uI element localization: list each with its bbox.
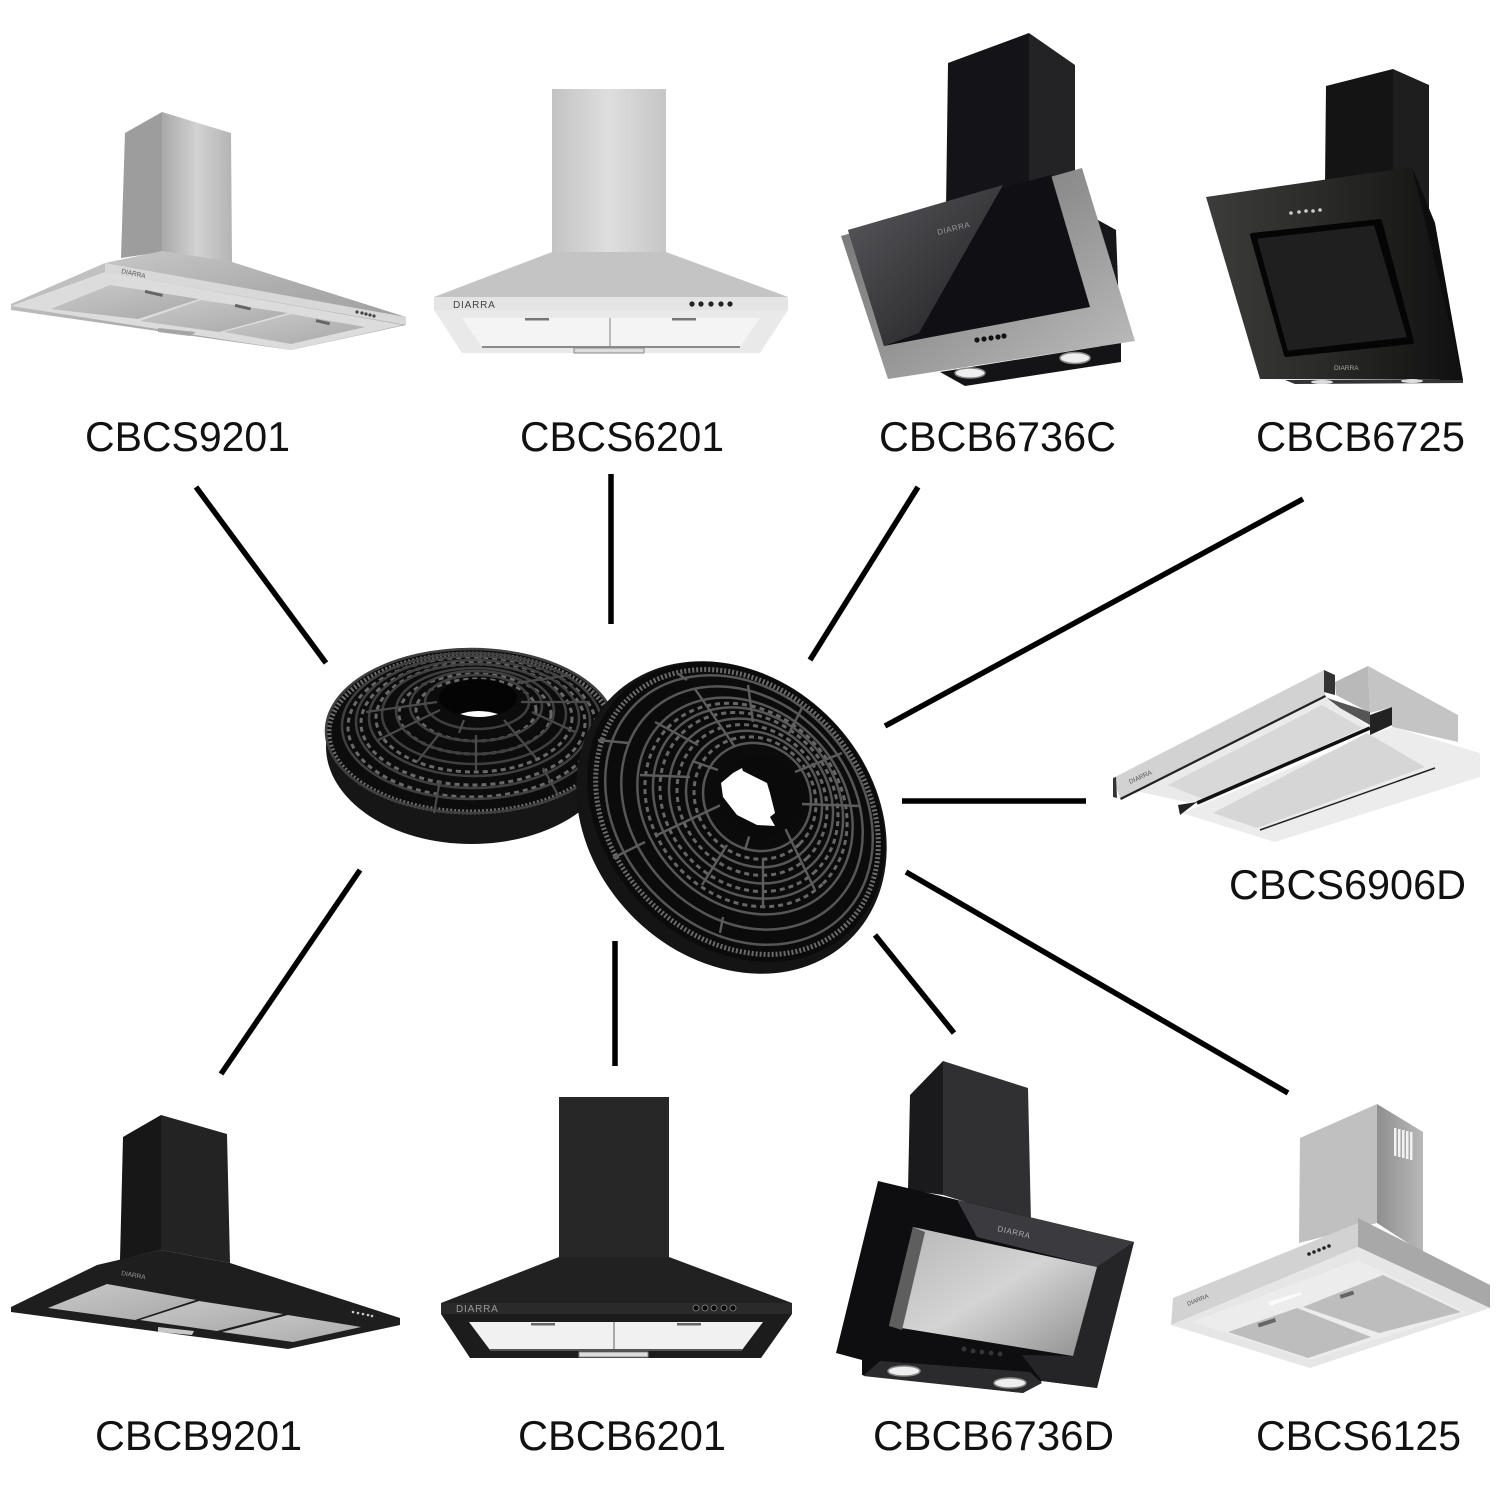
hood: CBCB6725 bbox=[1206, 69, 1463, 384]
label: CBCB6201: CBCB6201 bbox=[518, 1412, 726, 1459]
chimney vents bbox=[1394, 1128, 1412, 1160]
hood: CBCS6906D: DIARRA bbox=[1128, 769, 1154, 786]
hood: CBCB6201 bbox=[441, 1097, 792, 1358]
hood: CBCB6736C: DIARRA bbox=[936, 220, 971, 237]
hood: CBCS6125: DIARRA bbox=[1187, 1294, 1210, 1308]
hood: CBCB6201: DIARRA bbox=[456, 1304, 499, 1315]
hood: CBCS6906D bbox=[1113, 666, 1480, 842]
label: CBCB9201: CBCB9201 bbox=[95, 1412, 302, 1459]
hood: CBCS6201: DIARRA bbox=[453, 300, 496, 311]
label: CBCB6736C: CBCB6736C bbox=[879, 413, 1116, 460]
label: CBCB6736D: CBCB6736D bbox=[873, 1412, 1114, 1459]
hood: CBCB9201: DIARRA bbox=[121, 1270, 147, 1281]
carbon filter: right disc bbox=[513, 598, 950, 1037]
label: CBCS6906D: CBCS6906D bbox=[1229, 861, 1466, 908]
label: CBCS9201: CBCS9201 bbox=[85, 413, 290, 460]
hood: CBCB6736C bbox=[841, 33, 1135, 386]
hood: CBCB6736D: DIARRA bbox=[997, 1224, 1032, 1241]
hood: CBCS9201: DIARRA bbox=[121, 268, 147, 280]
hood: CBCB6736D bbox=[836, 1061, 1134, 1393]
carbon filter: left disc bbox=[326, 649, 617, 844]
hood: CBCB9201 bbox=[11, 1115, 400, 1349]
label: CBCB6725: CBCB6725 bbox=[1256, 413, 1465, 460]
hood: CBCS6201 bbox=[434, 89, 788, 353]
connector lines bbox=[196, 474, 1303, 1093]
label: CBCS6201: CBCS6201 bbox=[520, 413, 724, 460]
hood: CBCB6725: DIARRA bbox=[1334, 365, 1359, 372]
label: CBCS6125: CBCS6125 bbox=[1256, 1412, 1461, 1459]
hood: CBCS9201 bbox=[11, 112, 406, 350]
hood: CBCS6125 bbox=[1171, 1104, 1490, 1368]
